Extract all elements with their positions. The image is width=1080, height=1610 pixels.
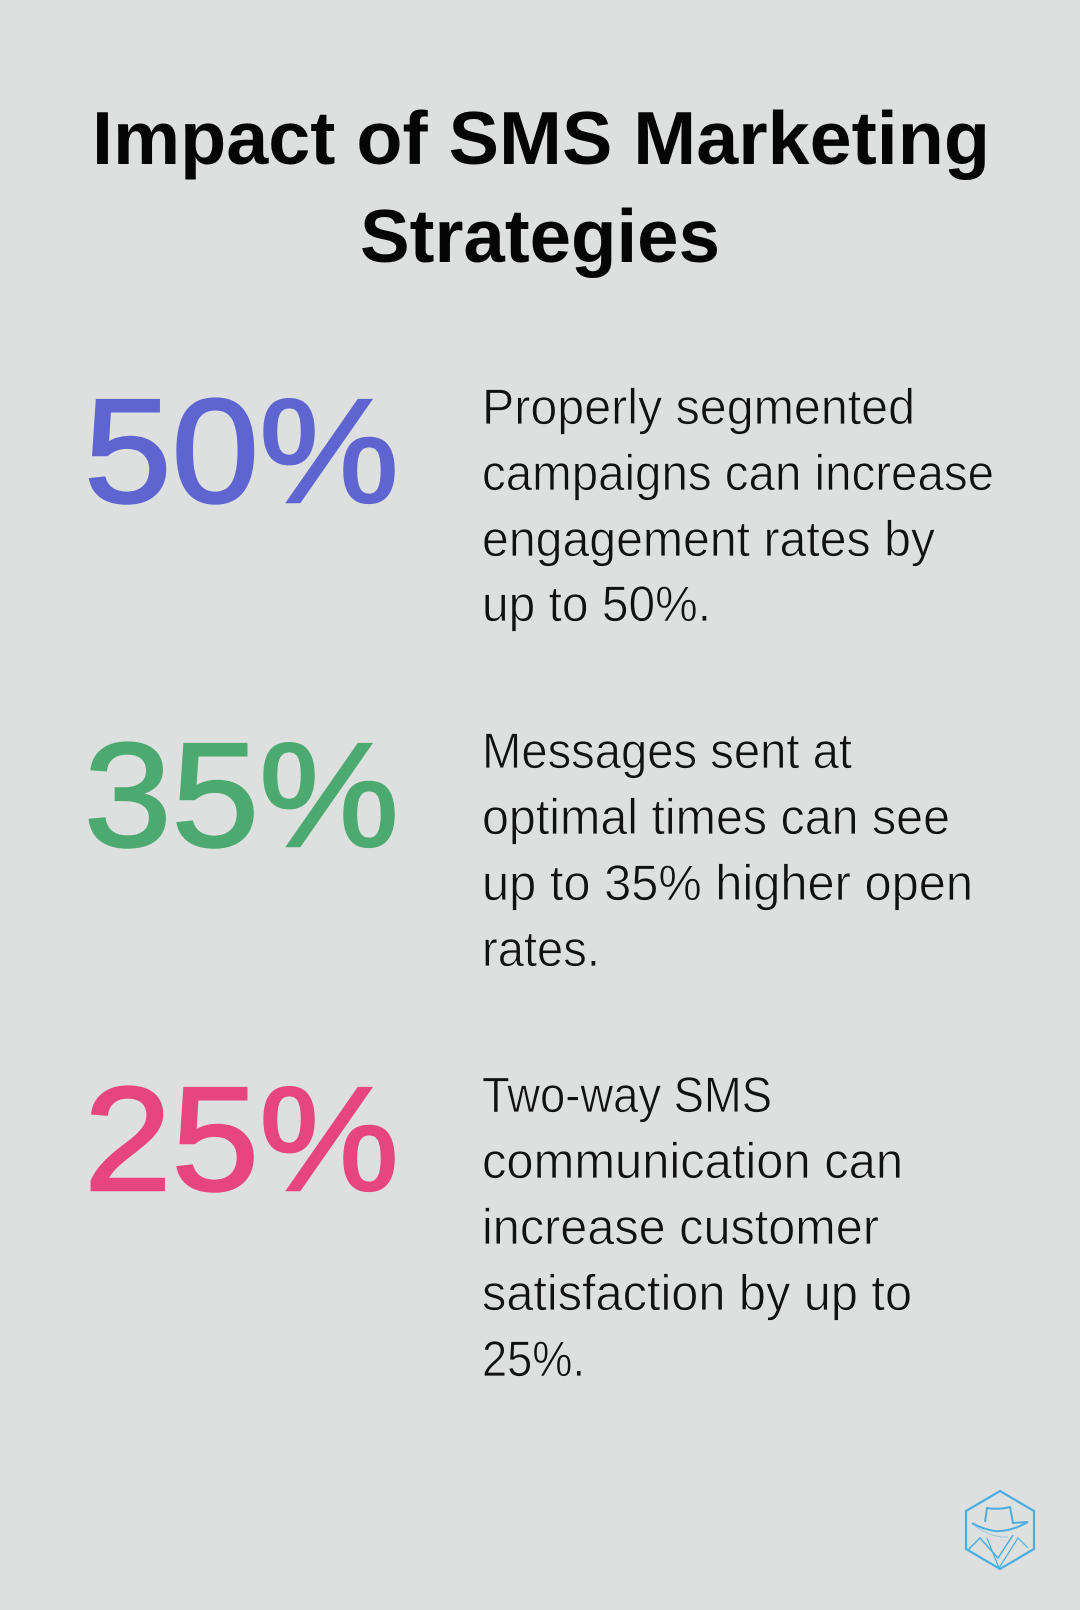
panel: stat 50% [84, 369, 994, 632]
description: optimal times: rates. [482, 921, 600, 977]
description: two-way SMS: 25%. [482, 1331, 585, 1387]
title [92, 96, 990, 278]
icon: hexagon logo with hat [966, 1491, 1034, 1569]
description: optimal times: up to 35% higher open [482, 855, 973, 911]
description: optimal times: Messages sent at [482, 723, 852, 779]
stat number: 50%: 50% [84, 369, 399, 534]
description: segmented campaigns: up to 50%. [482, 576, 711, 632]
description: two-way SMS: communication can [482, 1133, 903, 1189]
panel: stat 35% [84, 713, 973, 977]
panel: stat 25% [84, 1057, 912, 1387]
title: Impact of SMS Marketing [92, 96, 990, 180]
description: two-way SMS [482, 1067, 912, 1387]
description: segmented campaigns [482, 379, 994, 632]
description: optimal times: optimal times can see [482, 789, 950, 845]
stat number: 35%: 35% [84, 713, 399, 878]
description: segmented campaigns: Properly segmented [482, 379, 915, 435]
title: Strategies [360, 194, 720, 278]
stat number: 25%: 25% [84, 1057, 399, 1222]
description: optimal times [482, 723, 973, 977]
description: two-way SMS: satisfaction by up to [482, 1265, 912, 1321]
description: two-way SMS: increase customer [482, 1199, 879, 1255]
description: segmented campaigns: campaigns can increase [482, 445, 994, 501]
description: two-way SMS: Two-way SMS [482, 1067, 772, 1123]
description: segmented campaigns: engagement rates by [482, 511, 935, 567]
